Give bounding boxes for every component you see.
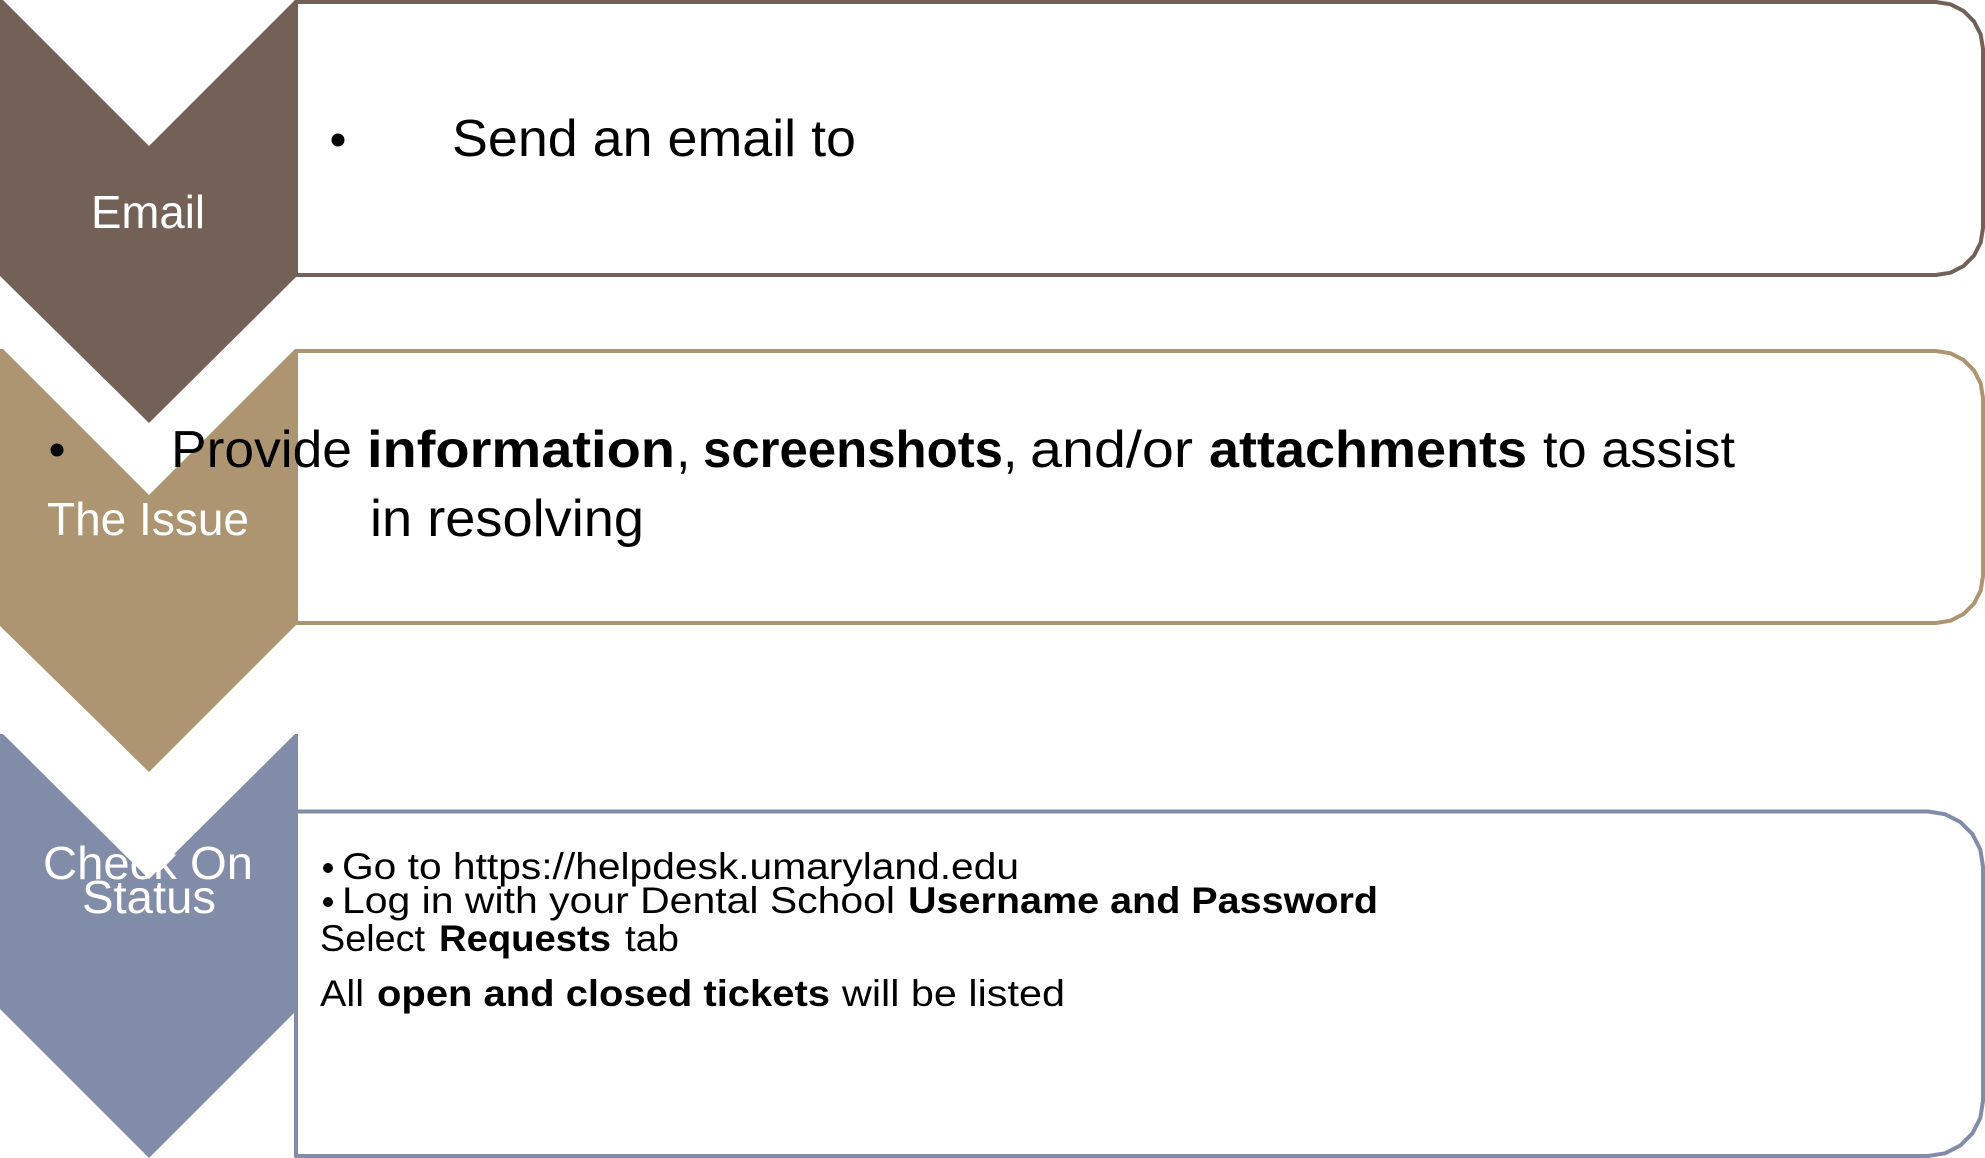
chevron: check on status xyxy=(0,734,298,1158)
text block: provide information: , xyxy=(1003,421,1017,479)
text block: provide information: in resolving xyxy=(370,490,644,548)
text block: check status steps: tab xyxy=(625,917,679,959)
chevron label: Check On Status: Check On xyxy=(43,837,253,889)
panel: the issue content box xyxy=(296,351,1983,623)
text block: check status steps: open and closed tickets xyxy=(377,972,830,1014)
text block: check status steps: Username and Password xyxy=(908,879,1378,921)
panel: email content box xyxy=(296,2,1983,275)
chevron label: The Issue: The Issue xyxy=(47,493,249,545)
text block: provide information: information xyxy=(367,421,675,479)
chevron label: Check On Status: Status xyxy=(82,871,216,923)
chevron label: Email: Email xyxy=(91,186,205,238)
text block: provide information: attachments xyxy=(1209,421,1527,479)
text block: check status steps: Log in with your Dental School xyxy=(342,879,895,921)
text block: provide information: Provide xyxy=(171,421,352,479)
text block: check status steps: Go to https://helpdesk.umaryland.edu xyxy=(342,845,1019,887)
chevron: the issue xyxy=(0,349,298,772)
text block: check status steps: Select xyxy=(320,917,426,959)
text block: check status steps: All xyxy=(320,972,364,1014)
text block: provide information: , xyxy=(676,421,690,479)
text block: check status steps: Requests xyxy=(439,917,611,959)
text block: check status steps xyxy=(320,845,1378,1014)
text block: check status steps: will be listed xyxy=(841,972,1065,1014)
text block: provide information xyxy=(50,421,1736,548)
chevron label: Check On Status xyxy=(43,837,253,923)
text block: provide information: screenshots xyxy=(703,421,1003,479)
panel: check on status content box xyxy=(296,812,1983,1156)
chevron: email xyxy=(0,0,298,423)
text block: send an email: Send an email to xyxy=(452,110,856,168)
text block: provide information: and/or xyxy=(1030,421,1193,479)
text block: provide information: to assist xyxy=(1543,421,1736,479)
